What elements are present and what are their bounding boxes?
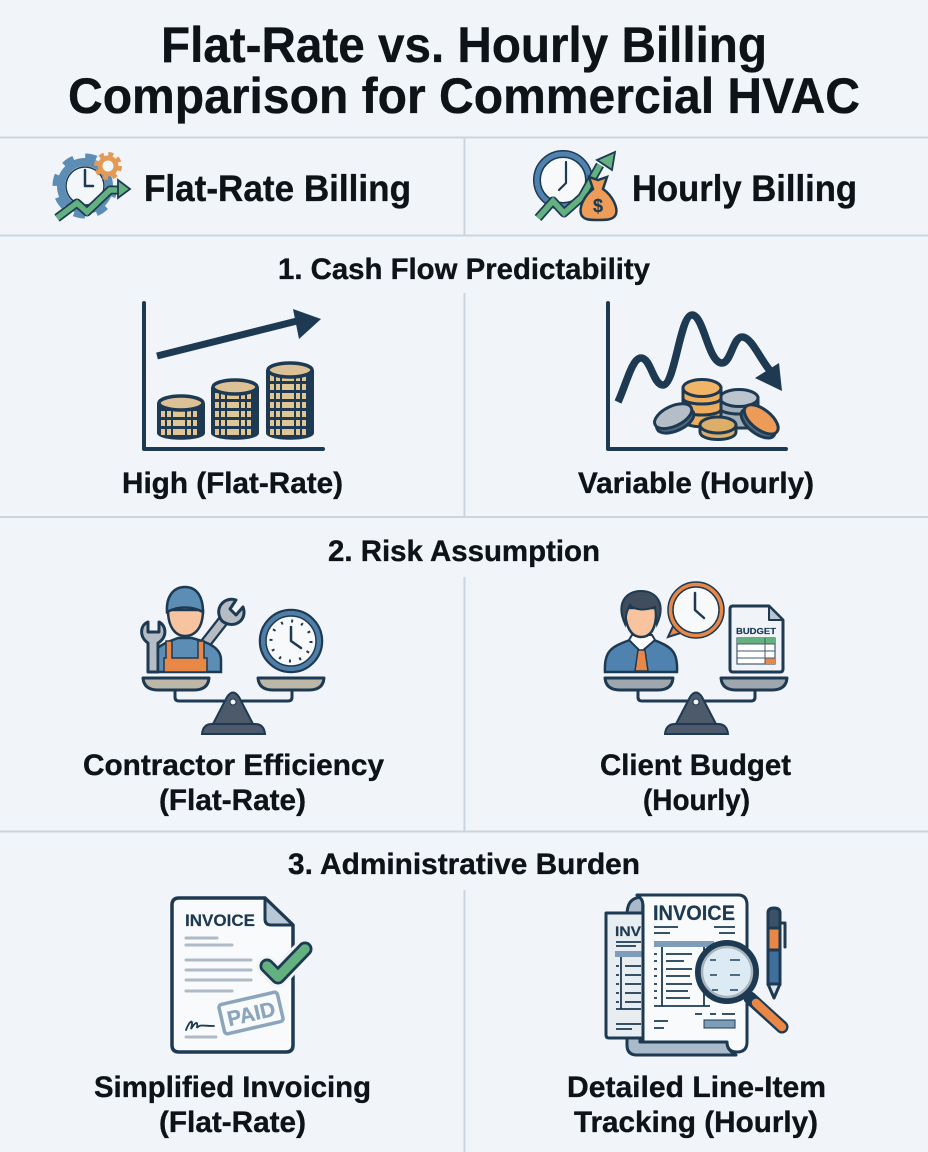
section 1: cash flow predictability	[122, 253, 814, 500]
scale icon: contractor vs clock	[142, 587, 324, 734]
right wrench	[205, 612, 230, 644]
section heading: 1. Cash Flow Predictability	[278, 253, 650, 286]
icon: clock, money bag and rising arrow	[537, 152, 616, 220]
label: contractor efficiency: (Flat-Rate)	[159, 784, 306, 817]
icon: simplified paid invoice: INVOICE	[185, 911, 255, 930]
column header: flat-rate billing	[56, 154, 411, 218]
label: contractor efficiency: Contractor Efficiency	[83, 749, 384, 782]
paid stamp: PAID	[225, 998, 278, 1031]
contractor	[158, 638, 221, 672]
gold stack	[683, 380, 721, 427]
title: Flat-Rate vs. Hourly Billing	[161, 17, 767, 73]
title	[68, 17, 860, 124]
label: detailed line-item tracking: Detailed Line-Item	[567, 1071, 826, 1104]
label: detailed line-item tracking	[567, 1071, 826, 1139]
scroll backing	[627, 897, 736, 1055]
tilted silver coin	[651, 399, 698, 438]
title: Comparison for Commercial HVAC	[68, 68, 860, 124]
label: simplified invoicing: Simplified Invoicing	[94, 1071, 371, 1104]
label: detailed line-item tracking: Tracking (Hourly)	[574, 1106, 818, 1139]
heading: flat-rate billing: Flat-Rate Billing	[144, 168, 411, 209]
chart icon: rising coin stacks	[144, 303, 323, 449]
heading: hourly billing: Hourly Billing	[632, 168, 857, 209]
icon: detailed invoices with magnifier: INV	[615, 923, 642, 939]
check mark	[267, 949, 305, 977]
tilted orange coin	[736, 399, 783, 444]
silver stack	[720, 390, 758, 428]
icon: simplified paid invoice	[172, 898, 305, 1052]
icon: detailed invoices with magnifier	[606, 895, 785, 1055]
column header: hourly billing	[537, 152, 857, 220]
label: client budget: (Hourly)	[643, 784, 750, 817]
budget document	[730, 606, 783, 672]
bottom gold coin	[700, 417, 736, 440]
section 3: administrative burden	[94, 848, 826, 1139]
scale icon: client vs budget	[605, 582, 787, 734]
label: high: High (Flat-Rate)	[122, 467, 343, 500]
chart icon: volatile line and scattered coins	[608, 303, 786, 449]
client	[605, 640, 677, 672]
section heading: 3. Administrative Burden	[288, 848, 640, 881]
section heading: 2. Risk Assumption	[328, 535, 600, 568]
balance	[175, 690, 292, 701]
pen	[768, 908, 785, 998]
magnifier	[750, 998, 782, 1027]
label: variable: Variable (Hourly)	[578, 467, 814, 500]
icon: detailed invoices with magnifier: INVOICE	[653, 902, 735, 925]
label: client budget	[600, 749, 791, 817]
left wrench	[142, 622, 165, 672]
section 2: risk assumption	[83, 535, 791, 817]
speech clock	[668, 624, 684, 637]
label: contractor efficiency	[83, 749, 384, 817]
label: simplified invoicing: (Flat-Rate)	[159, 1106, 306, 1139]
balance	[638, 690, 755, 701]
label: simplified invoicing	[94, 1071, 371, 1139]
back page	[606, 913, 643, 1038]
main page	[637, 895, 747, 1052]
label: client budget: Client Budget	[600, 749, 791, 782]
icon: clock, money bag and rising arrow: $	[593, 196, 603, 216]
clock	[260, 610, 322, 672]
paid stamp	[218, 992, 284, 1034]
icon: gears, clock and rising arrow	[56, 154, 130, 218]
scale icon: client vs budget: BUDGET	[736, 626, 777, 636]
